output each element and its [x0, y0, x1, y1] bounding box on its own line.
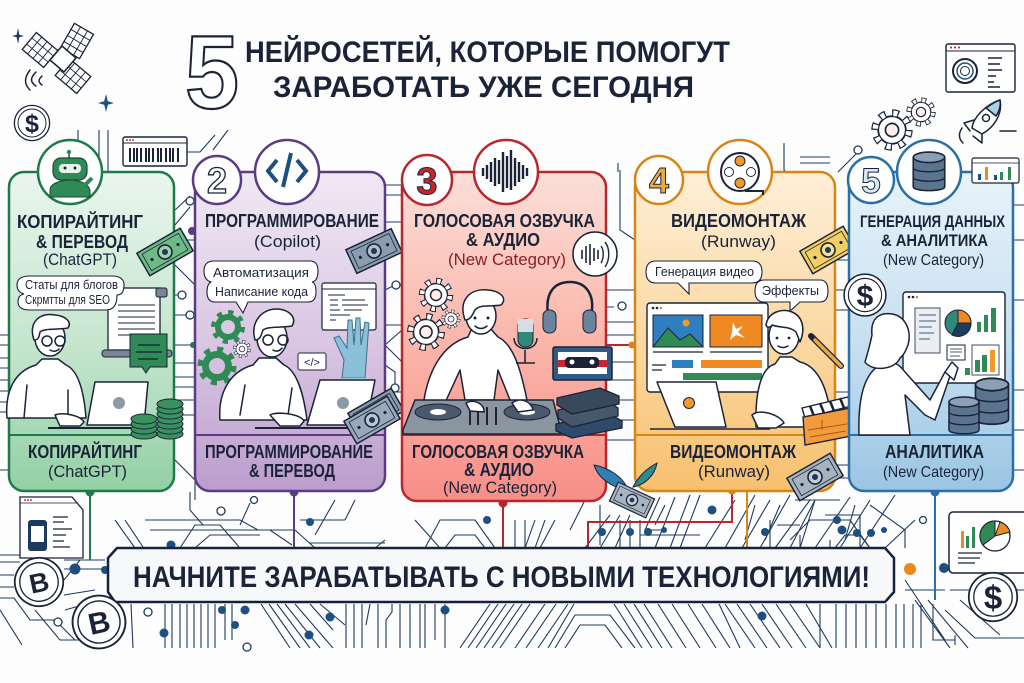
analytics window — [903, 292, 1005, 383]
video editor window — [647, 303, 768, 392]
panel 5 heading — [860, 212, 1006, 269]
DJ deck — [403, 400, 561, 434]
person with glasses and laptop — [7, 314, 150, 428]
icon: mini bar chart window — [972, 158, 1019, 183]
panel 2 heading: (Copilot) — [254, 232, 321, 251]
panel 1 heading: & ПЕРЕВОД — [36, 232, 128, 252]
icon: robot — [38, 140, 102, 204]
panel 1 footer text: КОПИРАЙТИНГ — [28, 441, 142, 462]
green note — [130, 334, 167, 373]
panel 2 heading — [205, 211, 379, 251]
panel 2 heading: ПРОГРАММИРОВАНИЕ — [205, 211, 379, 231]
panel: 2 programming — [193, 140, 385, 491]
speech bubble video generation: Генерация видео — [655, 264, 754, 279]
icon: sparkle blue — [98, 94, 114, 112]
person pointing — [859, 314, 958, 435]
circuit nodes — [54, 146, 949, 651]
tape stack — [556, 388, 622, 438]
icon: gray money bill — [787, 453, 843, 501]
panel 3 heading: ГОЛОСОВАЯ ОЗВУЧКА — [414, 211, 595, 231]
speech bubble video generation — [646, 261, 762, 294]
icon: left bottom window — [20, 497, 83, 558]
icon: code brackets — [255, 140, 319, 204]
icon: dollar coin top left — [14, 105, 50, 141]
icon: dollar coin on panel 5: $ — [857, 280, 874, 313]
icon: money with leaves — [594, 463, 657, 518]
speech bubble: Автоматизация — [213, 265, 309, 280]
circuit board background lines — [0, 130, 1024, 648]
icon: dollar coin right bottom — [969, 573, 1017, 621]
panel 3 divider — [402, 434, 606, 436]
panel 3 heading — [414, 211, 595, 269]
speech bubble: Написание кода — [215, 284, 309, 299]
panel: 1 copywriting — [7, 140, 183, 491]
number 2 badge — [193, 156, 241, 204]
person at mixer — [424, 290, 528, 405]
panel 4 footer text: (Runway) — [698, 462, 770, 481]
panel 3 card — [402, 172, 606, 501]
person with glasses and laptop — [220, 309, 375, 428]
gears green — [201, 313, 249, 382]
title — [185, 15, 730, 131]
title: big outlined number 5: 5 — [185, 15, 239, 131]
panel 1 footer text — [28, 441, 142, 481]
icon: gears top right — [875, 100, 933, 147]
panel 4 heading — [671, 211, 807, 251]
title line 1: НЕЙРОСЕТЕЙ, КОТОРЫЕ ПОМОГУТ — [245, 35, 730, 69]
panel 3 footer text: & АУДИО — [464, 460, 534, 480]
icon: dollar coin top left: $ — [25, 110, 39, 138]
icon: right bottom chart window — [949, 512, 1024, 573]
panel 3 heading: & АУДИО — [466, 230, 540, 250]
panel 3 footer text — [412, 442, 584, 497]
speech bubble — [17, 276, 124, 310]
icon: sound badge — [573, 232, 617, 276]
code tag: </> — [304, 357, 320, 369]
speech bubble — [204, 261, 318, 313]
title line 2: ЗАРАБОТАТЬ УЖЕ СЕГОДНЯ — [273, 71, 694, 104]
panel 4 heading: (Runway) — [701, 232, 776, 251]
icon: coin B lower: B — [85, 605, 113, 642]
number 4 badge — [635, 156, 683, 204]
number 3 badge — [402, 155, 452, 205]
icon: green money bill — [137, 228, 193, 276]
panel 5 footer text: (New Category) — [883, 464, 984, 481]
panel 4 footer text: ВИДЕОМОНТАЖ — [670, 442, 797, 462]
panel 5 heading: (New Category) — [883, 252, 984, 269]
number 3 badge: 3 — [416, 161, 438, 203]
data cylinders — [949, 378, 1008, 434]
headphones — [543, 282, 596, 333]
gears — [411, 281, 459, 347]
icon: coin B left: B — [27, 566, 52, 600]
icon: clapperboard — [802, 397, 851, 445]
icon: window top right — [946, 44, 1015, 92]
panel 1 heading: КОПИРАЙТИНГ — [17, 211, 143, 232]
icon: rocket — [959, 100, 1016, 143]
icon: coin B left — [10, 553, 68, 611]
panel 4 heading: ВИДЕОМОНТАЖ — [671, 211, 807, 231]
panel 3 footer text: ГОЛОСОВАЯ ОЗВУЧКА — [412, 442, 584, 462]
panel: 3 voice and audio — [402, 140, 622, 501]
icon: satellite — [22, 23, 94, 93]
icon: film reel — [708, 140, 772, 204]
number 2 badge: 2 — [207, 160, 227, 201]
panel 1 footer text: (ChatGPT) — [48, 462, 127, 481]
panel 5 divider — [849, 434, 1013, 436]
speech bubble effects — [755, 280, 828, 311]
cassette monitor — [553, 347, 612, 380]
number 4 badge: 4 — [649, 160, 669, 201]
panel 4 divider — [635, 434, 835, 436]
document scroll — [102, 288, 172, 357]
speech bubble effects: Эффекты — [762, 283, 819, 298]
code tag — [298, 353, 326, 370]
banner — [108, 548, 894, 602]
panel 1 divider — [9, 434, 174, 436]
panel 2 card — [195, 172, 385, 491]
pen — [811, 336, 841, 366]
icon: money bills — [344, 229, 404, 444]
speech bubble: Скрмтты для SEO — [25, 293, 110, 307]
panel 1 heading — [17, 211, 143, 269]
number 5 badge — [848, 157, 894, 203]
robot hand — [334, 318, 369, 398]
panel 4 footer text — [670, 442, 797, 481]
panel 3 heading: (New Category) — [448, 250, 566, 269]
icon: coin B lower — [68, 591, 130, 653]
panel 2 footer text: & ПЕРЕВОД — [249, 461, 335, 481]
panel: 4 video editing — [635, 140, 841, 491]
panel 1 heading: (ChatGPT) — [43, 250, 117, 269]
colored connectors — [86, 227, 940, 600]
panel 5 card — [849, 172, 1013, 491]
panel 3 footer text: (New Category) — [443, 478, 557, 497]
number 5 badge: 5 — [861, 162, 881, 201]
banner text: НАЧНИТЕ ЗАРАБАТЫВАТЬ С НОВЫМИ ТЕХНОЛОГИЯМИ! — [133, 561, 870, 594]
icon: sparkle small — [12, 28, 24, 44]
code window — [322, 283, 376, 330]
microphone — [514, 319, 537, 363]
panel 5 footer text: АНАЛИТИКА — [885, 442, 984, 462]
icon: database — [897, 140, 961, 204]
panel: 5 data analytics — [848, 140, 1013, 491]
panel 4 card — [635, 172, 835, 491]
icon: yellow money bill — [800, 226, 856, 274]
panel 1 card — [9, 172, 174, 491]
panel 2 footer text — [205, 442, 373, 481]
panel 5 footer text — [883, 442, 984, 481]
icon: dollar coin right bottom: $ — [984, 579, 1002, 616]
person with laptop — [650, 311, 831, 429]
coin stacks — [131, 399, 183, 439]
panel 2 divider — [195, 434, 385, 436]
speech bubble: Статы для блогов — [25, 278, 118, 292]
icon: sound wave — [474, 140, 538, 204]
panel 5 heading: & АНАЛИТИКА — [881, 231, 988, 250]
icon: barcode window — [123, 137, 187, 166]
panel 2 footer text: ПРОГРАММИРОВАНИЕ — [205, 442, 373, 462]
icon: dollar coin on panel 5 — [844, 274, 886, 316]
